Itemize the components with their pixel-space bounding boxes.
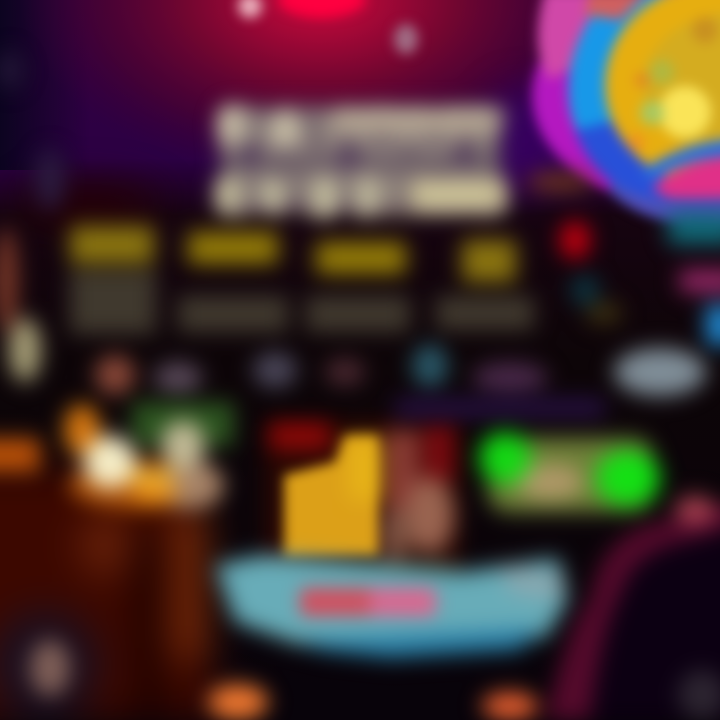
column headings	[70, 221, 590, 282]
column text	[70, 268, 534, 334]
rainbow wheel	[532, 0, 720, 226]
title: SYSTEMS	[217, 166, 507, 226]
left figure	[0, 438, 215, 720]
bottom lights	[208, 684, 538, 720]
row of small icons	[0, 52, 706, 396]
table label	[300, 588, 436, 616]
purple patches	[20, 90, 565, 227]
right side neon stack	[526, 173, 720, 345]
title	[217, 100, 507, 226]
left shading	[0, 0, 90, 170]
ceiling lights	[238, 0, 418, 54]
crimson ceiling glow	[0, 0, 640, 180]
right figure	[545, 496, 720, 720]
panel: centre card	[265, 420, 460, 579]
game table	[215, 555, 568, 658]
title: PAYOUT	[220, 100, 504, 165]
panel: right card	[395, 398, 660, 512]
panel: left card	[64, 402, 234, 509]
